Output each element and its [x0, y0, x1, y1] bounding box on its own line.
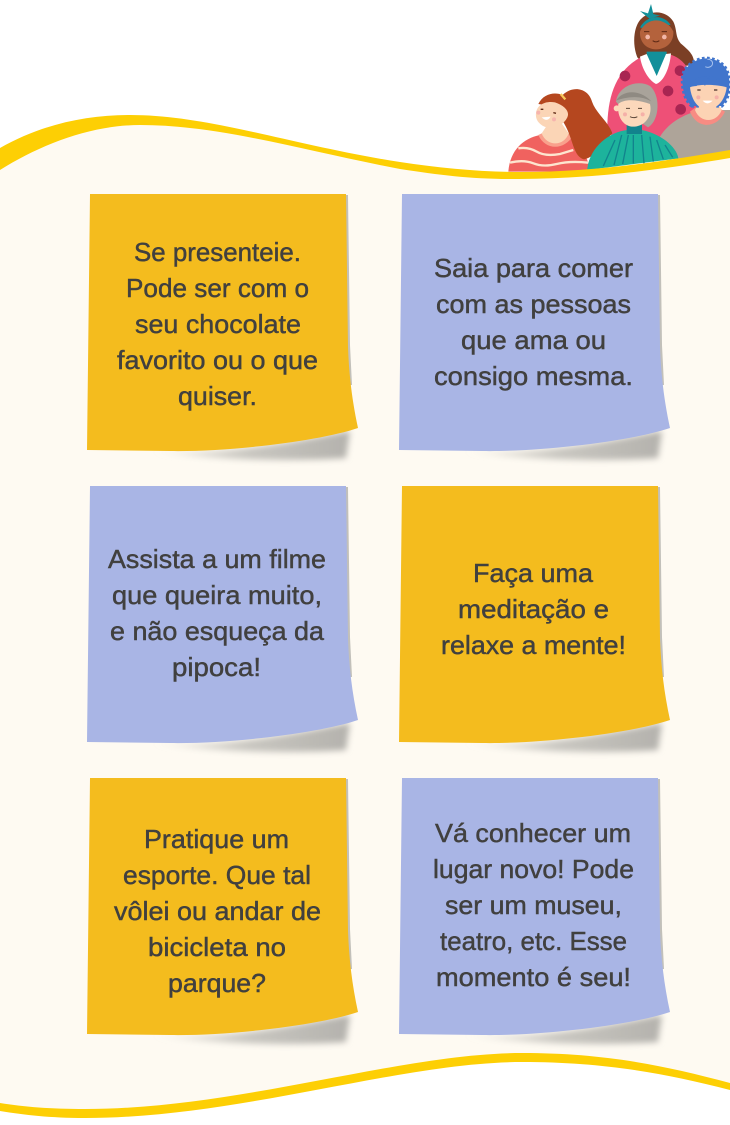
note: Saia para comer — [399, 194, 670, 460]
note: Pratique um esporte: bicicleta no — [148, 932, 286, 962]
note: Assista a um filme: pipoca! — [172, 652, 261, 682]
note: Se presenteie: Pode ser com o — [126, 273, 309, 303]
woman with blue hair — [660, 58, 730, 160]
note: Se presenteie: favorito ou o que — [117, 345, 318, 375]
note: Faça uma meditação: meditação e — [458, 594, 609, 624]
note: Pratique um esporte: esporte. Que tal — [123, 860, 311, 890]
note: Vá conhecer um lugar novo: lugar novo! Pode — [433, 854, 634, 884]
illustration: group of women — [508, 4, 730, 172]
note: Se presenteie: Se presenteie. — [134, 237, 301, 267]
note: Pratique um esporte: Pratique um — [144, 824, 289, 854]
note: Assista a um filme: Assista a um filme — [108, 544, 326, 574]
note: Assista a um filme — [87, 486, 358, 752]
note: Saia para comer: consigo mesma. — [434, 361, 633, 391]
note: Faça uma meditação: Faça uma — [473, 558, 594, 588]
note: Vá conhecer um lugar novo: ser um museu, — [445, 890, 622, 920]
note: Pratique um esporte — [87, 778, 358, 1044]
note: Faça uma meditação — [399, 486, 670, 752]
note: Se presenteie: quiser. — [178, 381, 257, 411]
woman with teal headband — [607, 4, 698, 140]
note: Vá conhecer um lugar novo: momento é seu! — [436, 962, 631, 992]
note: Saia para comer: com as pessoas — [436, 289, 631, 319]
note: Pratique um esporte: parque? — [168, 968, 266, 998]
note: Pratique um esporte: vôlei ou andar de — [114, 896, 321, 926]
note: Se presenteie: seu chocolate — [135, 309, 301, 339]
note: Assista a um filme: que queira muito, — [112, 580, 322, 610]
note: Se presenteie — [87, 194, 358, 460]
bottom yellow wave — [0, 1053, 730, 1118]
note: Vá conhecer um lugar novo — [399, 778, 670, 1044]
note: Saia para comer: que ama ou — [461, 325, 606, 355]
woman with red ponytail — [508, 89, 612, 172]
note: Assista a um filme: e não esqueça da — [110, 616, 325, 646]
note: Faça uma meditação: relaxe a mente! — [441, 630, 626, 660]
top yellow wave — [0, 115, 730, 179]
note: Saia para comer: Saia para comer — [434, 253, 633, 283]
note: Vá conhecer um lugar novo: Vá conhecer um — [435, 818, 631, 848]
woman with grey hair — [587, 83, 678, 170]
note: Vá conhecer um lugar novo: teatro, etc. Esse — [440, 926, 627, 956]
